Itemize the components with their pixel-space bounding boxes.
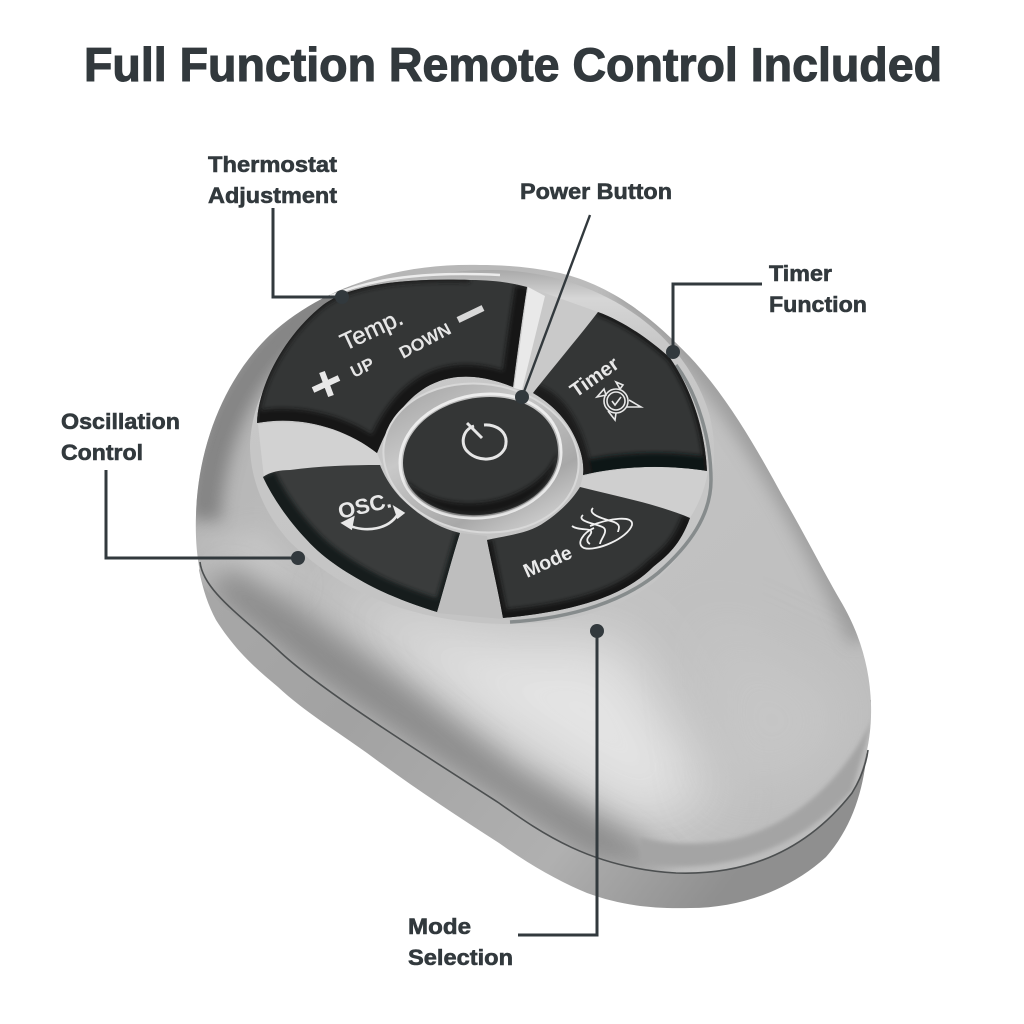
callout: thermostat adjustment: Adjustment	[208, 183, 338, 208]
upper shell	[190, 260, 880, 880]
button panel recess	[250, 270, 714, 624]
button: mode	[487, 487, 690, 618]
icon: alarm clock	[597, 382, 641, 420]
temp label: Temp.	[336, 304, 407, 356]
wedge highlights	[258, 287, 708, 619]
callout: mode selection: Selection	[408, 945, 513, 970]
remote control body	[190, 260, 880, 908]
seam between shells	[200, 562, 868, 873]
power ring	[374, 371, 588, 545]
button: timer	[533, 312, 707, 475]
plus icon	[313, 372, 339, 396]
minus icon	[458, 308, 483, 320]
title: Full Function Remote Control Included	[84, 38, 942, 91]
up label: UP	[347, 354, 377, 382]
callout: power button	[515, 179, 672, 404]
power button	[400, 394, 561, 518]
callout: oscillation control: Control	[61, 440, 143, 465]
icon: oscillation arrow	[343, 508, 403, 529]
callout: timer function: Timer	[769, 261, 832, 286]
icon: flames on base	[572, 508, 632, 549]
mode label: Mode	[520, 542, 576, 583]
timer label: Timer	[566, 353, 623, 402]
callout: power button: Power Button	[520, 179, 672, 204]
callout: timer function	[666, 261, 867, 359]
callout: thermostat adjustment: Thermostat	[208, 152, 338, 177]
callout: timer function: Function	[769, 292, 867, 317]
icon: power symbol	[463, 423, 506, 459]
callout: thermostat adjustment	[208, 152, 349, 304]
callout: mode selection: Mode	[408, 914, 471, 939]
callout: mode selection	[408, 624, 604, 970]
button: temperature	[257, 280, 527, 453]
down label: DOWN	[396, 319, 454, 363]
button: oscillation	[260, 462, 465, 617]
callout: oscillation control: Oscillation	[61, 409, 180, 434]
panel right edge shadow	[510, 365, 711, 622]
callout: oscillation control	[61, 409, 305, 565]
infographic canvas	[62, 46, 940, 966]
osc label: OSC.	[336, 488, 394, 524]
lower shell	[199, 560, 871, 908]
